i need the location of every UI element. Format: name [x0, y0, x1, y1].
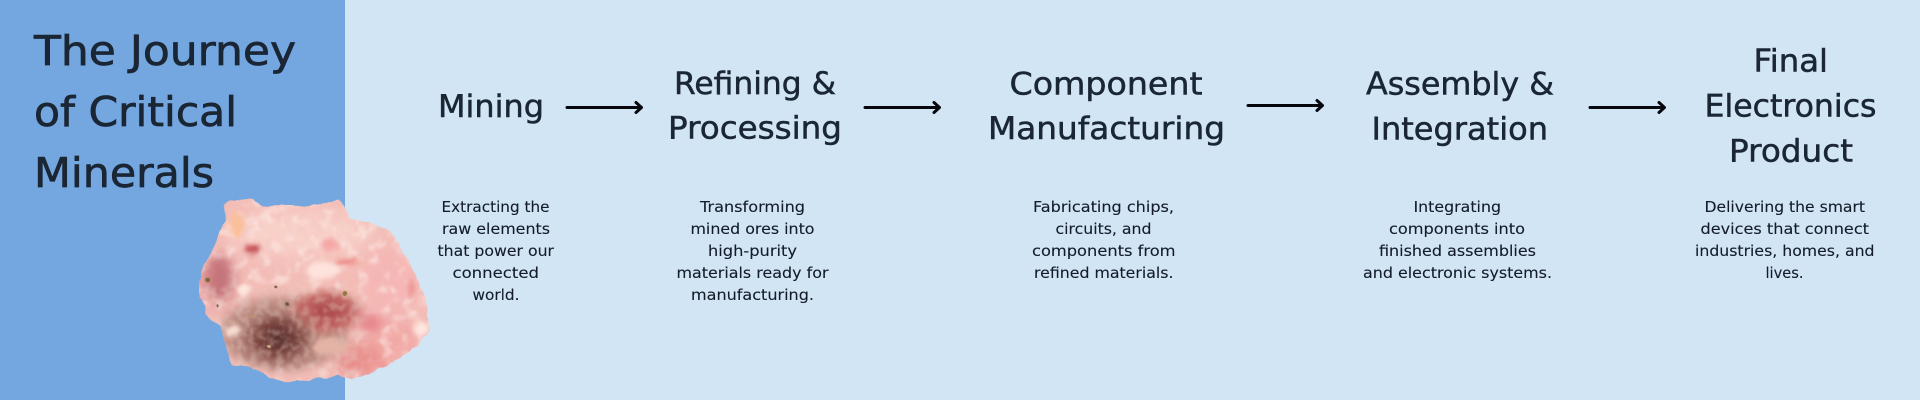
icon: pink mineral rock	[198, 198, 430, 382]
text: Refining description: materials ready for	[676, 264, 829, 282]
arrow: Refining to Component	[865, 102, 940, 112]
heading: Refining & Processing: Processing	[668, 110, 842, 146]
text: Component description: Fabricating chips,	[1033, 198, 1174, 216]
arrow: Component to Assembly	[1248, 100, 1322, 110]
text: Final product description: industries, homes, and	[1695, 242, 1874, 260]
heading: Final Electronics Product	[1704, 44, 1876, 170]
step: Mining	[438, 89, 555, 304]
heading: Final Electronics Product: Product	[1729, 134, 1853, 170]
heading: Refining & Processing	[668, 66, 842, 146]
text: Final product description: devices that connect	[1700, 220, 1869, 238]
heading: Mining: Mining	[438, 89, 544, 125]
text: Mining description: connected	[452, 264, 539, 282]
text: Component description: refined materials.	[1034, 264, 1174, 282]
text: Final product description	[1695, 198, 1874, 282]
step: Refining & Processing	[668, 66, 842, 304]
text: Mining description: that power our	[438, 242, 555, 260]
text: Mining description	[438, 198, 555, 304]
heading: Component Manufacturing: Manufacturing	[988, 111, 1225, 147]
heading: Assembly & Integration	[1366, 66, 1554, 148]
text: Refining description: Transforming	[699, 198, 805, 216]
arrow: Mining to Refining	[567, 102, 642, 112]
text: Refining description: mined ores into	[690, 220, 814, 238]
heading: Final Electronics Product: Final	[1754, 44, 1828, 80]
heading: Assembly & Integration: Integration	[1372, 112, 1548, 148]
heading: Assembly & Integration: Assembly &	[1366, 66, 1554, 102]
text: Assembly description: Integrating	[1414, 198, 1501, 216]
heading: Component Manufacturing	[988, 66, 1225, 147]
text: Final product description: Delivering the smart	[1704, 198, 1865, 216]
text: Assembly description	[1363, 198, 1552, 282]
title: of Critical	[34, 88, 237, 136]
text: Component description	[1032, 198, 1176, 282]
panel: title sidebar	[0, 0, 345, 400]
text: Component description: circuits, and	[1056, 220, 1152, 238]
step: Assembly & Integration	[1363, 66, 1554, 282]
title: The Journey	[33, 27, 296, 75]
step: Component Manufacturing	[988, 66, 1225, 282]
title	[33, 27, 296, 197]
text: Assembly description: finished assemblies	[1379, 242, 1536, 260]
text: Final product description: lives.	[1766, 264, 1804, 282]
title: Minerals	[34, 149, 214, 197]
text: Assembly description: components into	[1389, 220, 1525, 238]
arrow: Assembly to Final	[1590, 102, 1664, 112]
heading: Refining & Processing: Refining &	[674, 66, 836, 102]
heading: Component Manufacturing: Component	[1010, 66, 1202, 102]
text: Mining description: world.	[472, 286, 520, 304]
text: Refining description	[676, 198, 829, 304]
text: Refining description: manufacturing.	[691, 286, 814, 304]
text: Component description: components from	[1032, 242, 1176, 260]
step: Final Electronics Product	[1695, 44, 1876, 282]
text: Mining description: raw elements	[442, 220, 550, 238]
text: Refining description: high-purity	[708, 242, 797, 260]
text: Mining description: Extracting the	[442, 198, 550, 216]
heading: Final Electronics Product: Electronics	[1704, 88, 1876, 124]
text: Assembly description: and electronic systems.	[1363, 264, 1552, 282]
